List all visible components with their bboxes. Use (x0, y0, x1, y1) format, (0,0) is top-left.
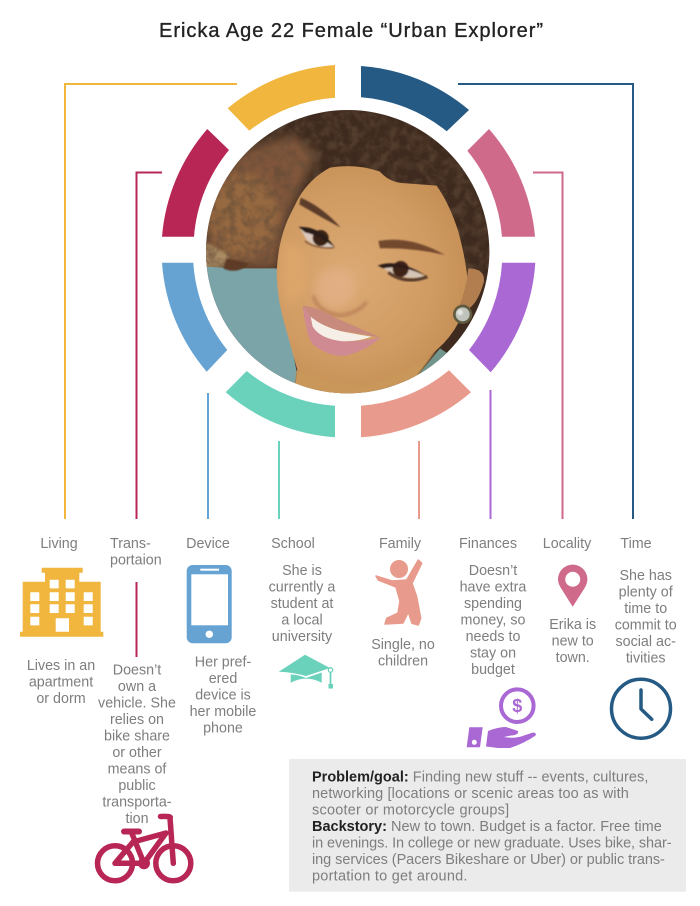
text: school: student at (271, 596, 333, 612)
connector: transportation (136, 172, 162, 519)
text: transportation: tion (125, 811, 149, 827)
segmented ring (162, 65, 535, 437)
text: device: phone (203, 720, 243, 736)
right brow (378, 240, 445, 255)
text: transportation: or other (112, 745, 162, 761)
icon: hand holding coin: $ (512, 696, 522, 716)
text: device: device is (195, 688, 251, 704)
text: finances: needs to (466, 629, 520, 645)
connector: school (278, 441, 280, 519)
text: locality: town. (556, 650, 590, 666)
ring segment: device (162, 263, 227, 372)
heading: locality: Locality (543, 536, 592, 552)
connector: device (207, 393, 209, 519)
column: living (20, 536, 103, 707)
text: transportation: bike share (104, 728, 170, 744)
text: living: Lives in an (27, 658, 95, 674)
left brow (299, 198, 341, 228)
ring segment: time (361, 66, 469, 131)
left eye (299, 227, 335, 248)
text: time: plenty of (619, 584, 673, 600)
connector: time (458, 84, 633, 519)
text: finances: budget (471, 662, 515, 678)
column: device (186, 536, 256, 736)
heading: transportation: Trans- (110, 536, 151, 552)
heading: living: Living (40, 536, 78, 552)
text: living: apartment (29, 674, 93, 690)
callout text: in evenings. In college or new graduate. Uses bike, shar- (312, 836, 672, 852)
ring segment: school (226, 371, 335, 437)
text: time: commit to (615, 618, 677, 634)
heading: device: Device (186, 536, 230, 552)
text: transportation: transporta- (102, 794, 172, 810)
ring segment: finances (469, 263, 535, 372)
column: finances (459, 536, 536, 748)
text: locality: Erika is (549, 617, 596, 633)
callout text: Finding new stuff -- events, cultures, (409, 770, 648, 786)
text: school: university (272, 629, 333, 645)
column: school (269, 536, 335, 688)
text: transportation: own a (118, 679, 156, 695)
ring segment: locality (467, 129, 535, 237)
connector: locality (533, 172, 562, 519)
text: finances: spending (464, 596, 522, 612)
text: school: She is (282, 563, 322, 579)
text: transportation: Doesn’t (113, 662, 161, 678)
column: time (612, 536, 677, 738)
text: locality: new to (552, 634, 594, 650)
callout: problem and backstory (289, 759, 686, 892)
text: time: social ac- (616, 634, 676, 650)
text: time: tivities (626, 650, 666, 666)
connector: transportation lower (136, 582, 138, 657)
text: device: Her pref- (195, 654, 251, 670)
text: family: children (378, 654, 428, 670)
callout text: New to town. Budget is a factor. Free time (387, 819, 662, 835)
column: locality (543, 536, 596, 666)
title: Ericka Age 22 Female “Urban Explorer” (159, 20, 544, 42)
heading: family: Family (379, 536, 422, 552)
heading: transportation: portaion (110, 552, 162, 568)
connector: finances (490, 390, 492, 519)
icon: clock (612, 679, 670, 738)
callout text: networking [locations or scenic areas too as with (312, 786, 629, 802)
text: device: ered (209, 671, 237, 687)
portrait illustration (203, 108, 493, 402)
icon: map pin (558, 565, 587, 607)
icon: jumping person (376, 560, 422, 625)
text: transportation: public (118, 778, 156, 794)
ring segment: living (228, 65, 335, 131)
heading: finances: Finances (459, 536, 517, 552)
icon: building (20, 568, 103, 637)
callout text: scooter or motorcycle groups] (312, 802, 509, 818)
column: family (371, 536, 435, 670)
text: finances: have extra (460, 580, 526, 596)
text: finances: money, so (461, 612, 525, 628)
earring (453, 305, 472, 324)
mouth (303, 306, 381, 356)
callout text: portation to get around. (312, 868, 468, 884)
text: school: a local (281, 612, 323, 628)
text: time: time to (624, 601, 667, 617)
icon: hand holding coin (467, 689, 536, 748)
text: transportation: vehicle. She (98, 696, 176, 712)
text: family: Single, no (371, 637, 435, 653)
text: living: or dorm (36, 691, 86, 707)
nose (315, 268, 355, 308)
icon: phone (187, 565, 232, 643)
connector: family (418, 441, 420, 519)
icon: graduation cap (279, 655, 333, 688)
heading: time: Time (620, 536, 652, 552)
icon: bicycle (98, 816, 191, 881)
right eye (378, 261, 427, 280)
callout text: Problem/goal: (312, 770, 409, 786)
callout text: ing services (Pacers Bikeshare or Uber) or public trans- (312, 852, 665, 868)
text: transportation: relies on (110, 712, 164, 728)
ring segment: family (361, 370, 471, 437)
heading: school: School (271, 536, 315, 552)
column: transportation (98, 536, 191, 881)
connector: living (65, 84, 237, 519)
text: device: her mobile (190, 704, 256, 720)
text: finances: stay on (470, 646, 516, 662)
text: finances: Doesn’t (469, 563, 517, 579)
text: time: She has (619, 568, 672, 584)
text: transportation: means of (108, 762, 166, 778)
ring segment: transportation (162, 129, 229, 237)
callout text: Backstory: (312, 819, 387, 835)
text: school: currently a (269, 580, 335, 596)
